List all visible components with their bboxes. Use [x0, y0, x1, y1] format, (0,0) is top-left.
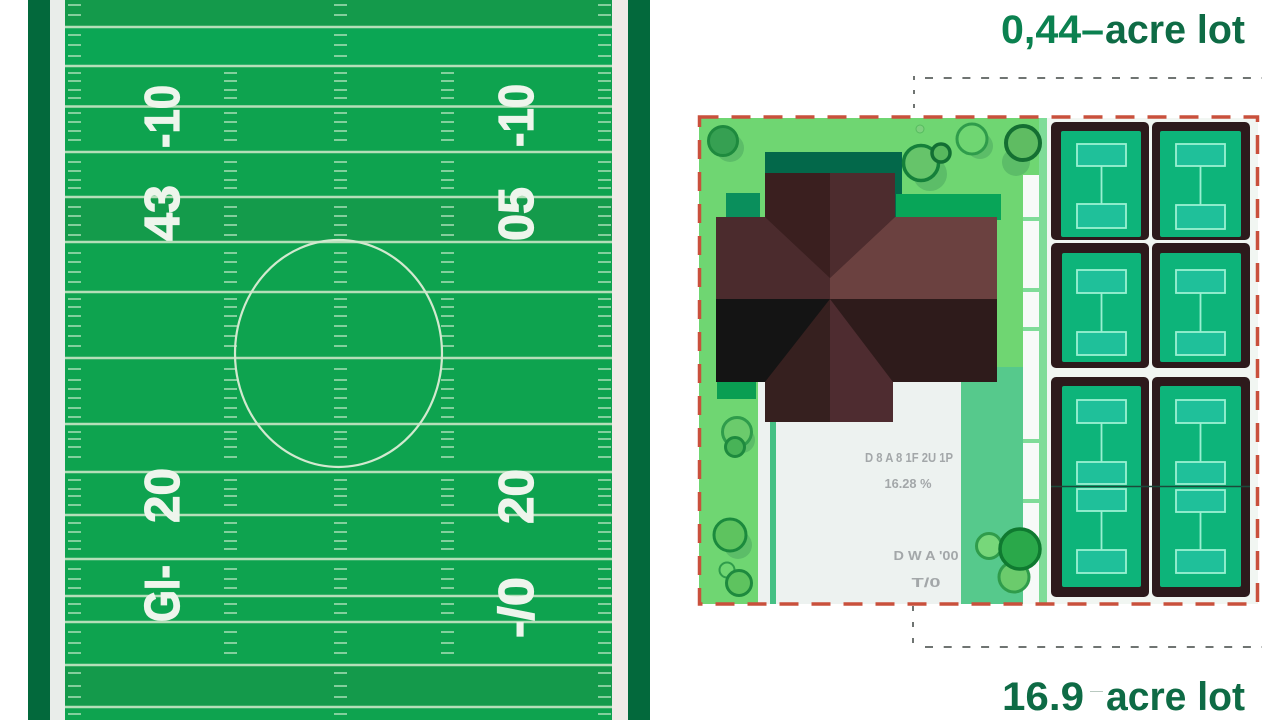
driveway labels: D W A '00	[894, 548, 958, 563]
panel: residential lot plan	[699, 117, 1258, 604]
yard numbers: 43	[136, 185, 190, 241]
heading: small lot label: acre lot	[1105, 8, 1245, 52]
driveway labels	[865, 450, 958, 590]
dimension line: bottom	[913, 606, 1262, 648]
house roof	[716, 173, 997, 422]
driveway	[758, 382, 961, 604]
hash marks	[68, 5, 611, 714]
field turf	[65, 0, 612, 720]
trees	[708, 124, 1040, 596]
court net divider	[1051, 486, 1250, 488]
yard numbers: -10	[136, 85, 190, 148]
driveway labels: 16.28 %	[884, 476, 932, 491]
heading: large lot label: acre lot	[1106, 675, 1245, 719]
yard numbers: 20	[136, 468, 190, 523]
tennis courts	[1051, 122, 1250, 597]
heading: large lot label	[1002, 675, 1245, 719]
field left border	[28, 0, 50, 720]
court area background	[1040, 118, 1258, 604]
house foundations	[717, 152, 1001, 399]
heading: small lot label	[1001, 8, 1245, 52]
field right sideline	[612, 0, 628, 720]
driveway stripe	[770, 382, 776, 604]
yard lines	[65, 27, 612, 707]
heading: small lot label: 0,44–	[1001, 8, 1104, 52]
yard numbers: 05	[490, 187, 544, 241]
yard numbers: -/0	[490, 577, 544, 638]
lot boundary	[700, 117, 1258, 604]
panel: football field	[28, 0, 650, 720]
court surfaces	[1061, 131, 1241, 587]
yard numbers	[136, 84, 544, 638]
court frames	[1051, 122, 1250, 597]
field right border	[628, 0, 650, 720]
side lawn strip	[961, 367, 1023, 604]
heading: large lot label: 16.9	[1002, 675, 1084, 719]
yard numbers: 20	[490, 469, 544, 524]
center circle	[235, 240, 442, 467]
tree shadows	[716, 133, 1030, 559]
driveway labels: D 8 A 8 1F 2U 1P	[865, 450, 953, 465]
field left sideline	[50, 0, 65, 720]
lot lawn	[699, 118, 1040, 604]
yard numbers: -10	[490, 84, 544, 147]
walkway with rungs	[1023, 118, 1047, 604]
yard numbers: GI-	[136, 565, 190, 622]
dimension line: top	[914, 76, 1262, 112]
court markings	[1077, 144, 1225, 573]
driveway labels: T/0	[912, 575, 940, 590]
